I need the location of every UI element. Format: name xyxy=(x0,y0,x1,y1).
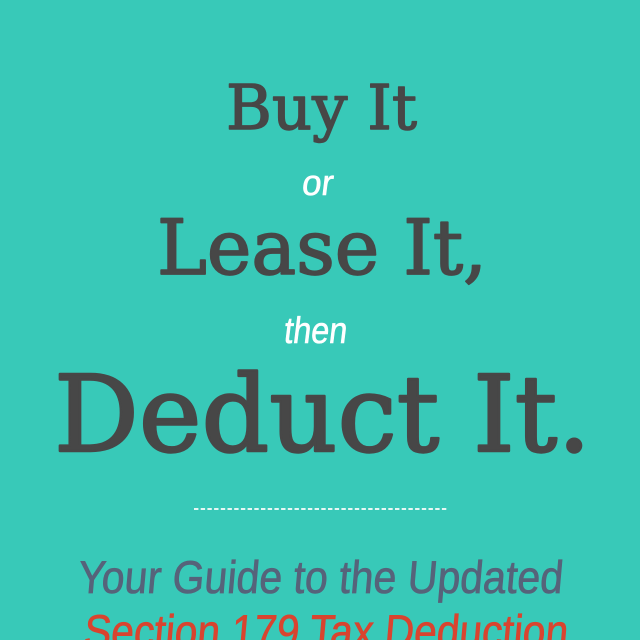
subtitle: Your Guide to the Updated: Your Guide to the Updated xyxy=(76,551,566,603)
connector word: or: or xyxy=(300,162,336,203)
connector word: then: then xyxy=(282,309,350,351)
title: Deduct It.: Deduct It. xyxy=(54,353,591,476)
title: Buy It: Buy It xyxy=(226,71,417,144)
dashed divider xyxy=(194,508,448,510)
title: Lease It,: Lease It, xyxy=(157,203,487,292)
